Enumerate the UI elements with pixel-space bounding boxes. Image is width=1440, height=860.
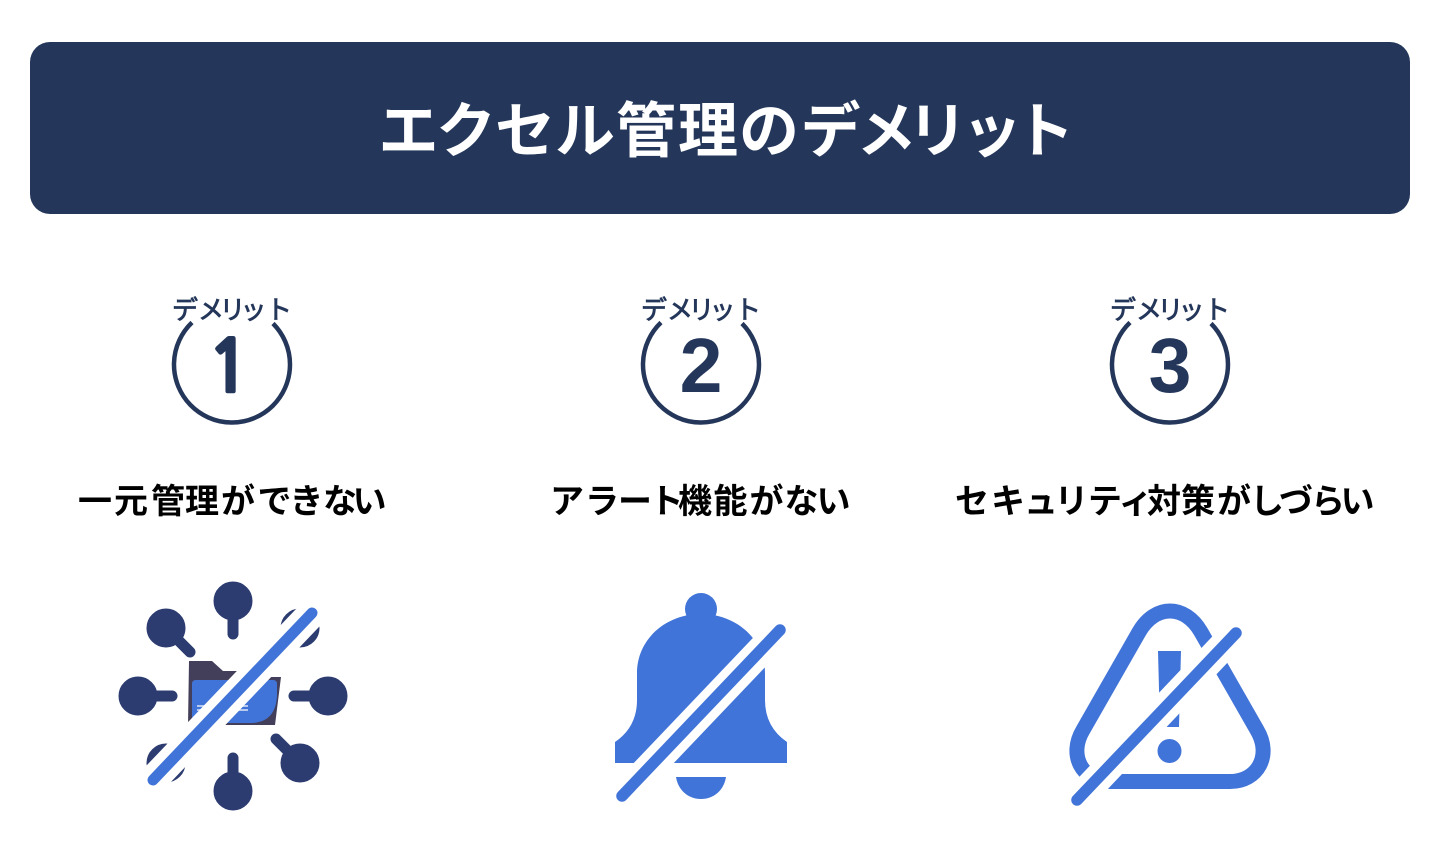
badge: demerit 1: 1 <box>207 331 251 403</box>
panel: demerit 2 <box>550 290 850 809</box>
badge: demerit 2: デメリット <box>641 290 761 327</box>
heading: demerit 2: アラート機能がない <box>550 474 850 523</box>
heading: demerit 3: セキュリティ対策がしづらい <box>955 474 1374 523</box>
panel: demerit 1 <box>78 290 386 805</box>
badge: demerit 3 <box>1110 290 1230 423</box>
title banner <box>30 42 1410 214</box>
badge: demerit 3: 3 <box>1149 323 1191 409</box>
badge: demerit 2 <box>641 290 761 423</box>
badge: demerit 1: デメリット <box>172 290 292 327</box>
panel: demerit 3 <box>955 290 1374 811</box>
heading: demerit 1: 一元管理ができない <box>78 474 386 523</box>
badge: demerit 2: 2 <box>680 323 722 409</box>
icon: decentralised folder crossed out <box>124 587 342 805</box>
icon: warning triangle crossed out <box>1067 611 1263 811</box>
icon: bell crossed out <box>610 593 790 809</box>
badge: demerit 1 <box>172 290 292 423</box>
title banner: エクセル管理のデメリット <box>378 83 1074 170</box>
badge: demerit 3: デメリット <box>1110 290 1230 327</box>
